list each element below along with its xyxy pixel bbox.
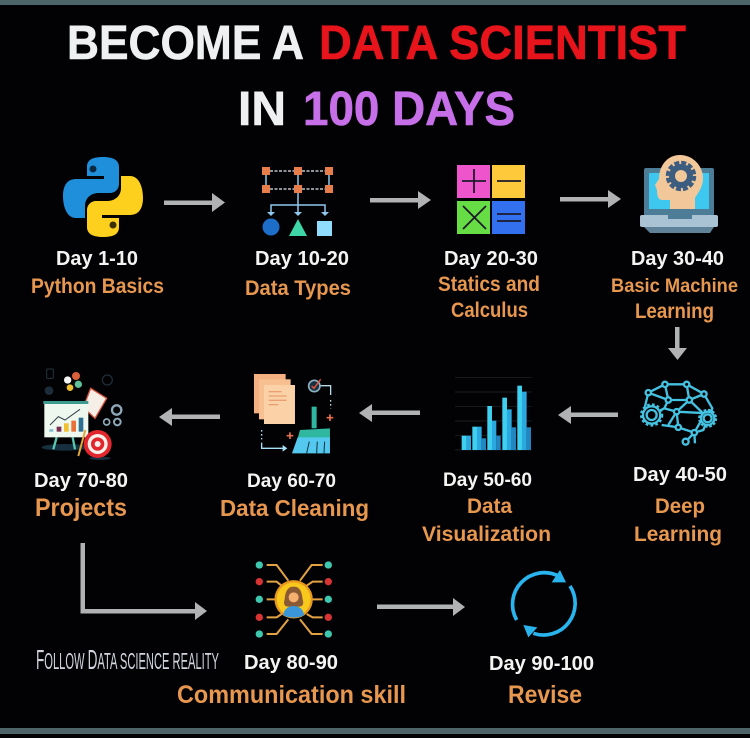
label: learning: Learning (634, 523, 722, 546)
icon: laptop with head and gear (640, 155, 718, 233)
panel: day 10-20 data types (245, 167, 351, 300)
label: day 60-70: Day 60-70 (247, 471, 336, 492)
title: 100 DAYS (303, 83, 515, 136)
arrow: step 1 to 2 (164, 193, 225, 212)
panel: day 60-70 data cleaning (220, 374, 369, 521)
label: day 80-90: Day 80-90 (244, 652, 338, 674)
icon: bar chart (455, 377, 532, 450)
arrow: step 4 to 5 (668, 327, 687, 360)
label: projects: Projects (35, 494, 127, 522)
icon: presentation board and target (42, 369, 121, 460)
icon: documents and broom (254, 374, 333, 453)
label: day 10-20: Day 10-20 (255, 248, 349, 270)
panel: day 40-50 deep learning (633, 382, 727, 546)
label: communication skill: Communication skill (177, 681, 406, 709)
arrow: step 5 to 6 (558, 406, 618, 424)
label: python basics: Python Basics (31, 275, 164, 298)
label: day 70-80: Day 70-80 (34, 470, 128, 492)
icon: neural brain (641, 382, 716, 445)
label: day 90-100: Day 90-100 (489, 653, 594, 675)
panel: day 20-30 statics and calculus (438, 165, 540, 322)
label: learning: Learning (635, 300, 714, 323)
arrow: step 3 to 4 (560, 190, 621, 208)
label: data types: Data Types (245, 277, 351, 300)
label: statics and: Statics and (438, 273, 540, 296)
label: data cleaning: Data Cleaning (220, 495, 369, 521)
icon: data types diagram (262, 167, 333, 236)
label: day 20-30: Day 20-30 (444, 248, 538, 270)
label: day 1-10: Day 1-10 (56, 248, 138, 270)
arrow: step 2 to 3 (370, 191, 431, 209)
panel: day 1-10 python basics (31, 157, 164, 298)
label: revise: Revise (508, 681, 582, 709)
icon: math operators (457, 165, 525, 234)
panel: day 50-60 data visualization (422, 377, 551, 546)
label: day 40-50: Day 40-50 (633, 464, 727, 486)
title: DATA SCIENTIST (319, 17, 686, 70)
icon: refresh cycle (513, 570, 575, 637)
label: visualization: Visualization (422, 523, 551, 546)
label: basic machine: Basic Machine (611, 276, 738, 297)
icon: person with network (256, 561, 332, 638)
panel: day 80-90 communication skill (177, 561, 406, 709)
arrow: step 7 to 8 (159, 408, 220, 426)
panel: day 90-100 revise (489, 570, 594, 709)
title (67, 17, 686, 136)
label: day 50-60: Day 50-60 (443, 470, 532, 491)
arrow: step 9 to 10 (377, 598, 465, 616)
panel: day 30-40 basic machine learning (611, 155, 738, 323)
arrow: step 6 to 7 (359, 404, 420, 422)
credit: follow data science reality: FOLLOW DATA SCIENCE REALITY (36, 644, 219, 675)
icon: python logo (63, 157, 143, 237)
title: IN (238, 83, 286, 136)
title: BECOME A (67, 17, 304, 70)
panel: day 70-80 projects (34, 369, 128, 522)
arrow: elbow to step 9 (80, 543, 207, 620)
label: data: Data (467, 495, 512, 518)
label: day 30-40: Day 30-40 (631, 248, 724, 270)
label: calculus: Calculus (451, 299, 528, 322)
label: deep: Deep (655, 495, 705, 518)
